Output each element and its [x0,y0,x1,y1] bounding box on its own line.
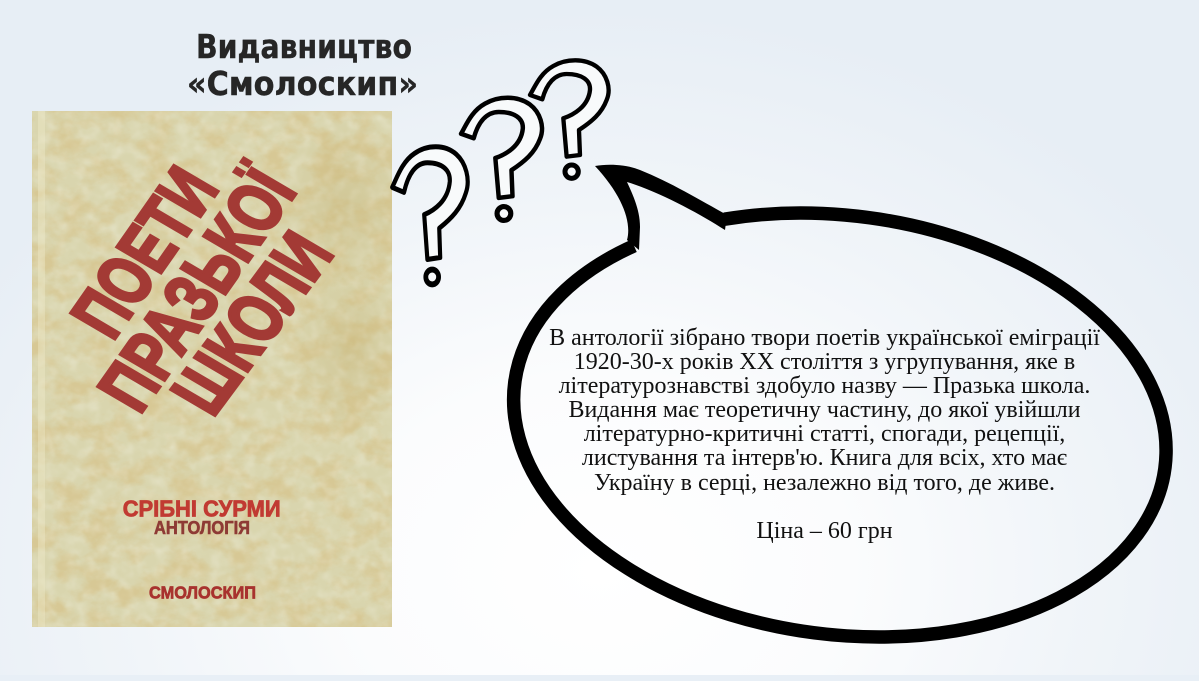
bubble text: Україну в серці, незалежно від того, де живе. [594,470,1055,496]
bubble text [549,325,1100,544]
bubble outline [514,213,1166,637]
cover title [68,156,336,418]
icon: question mark left [392,147,468,284]
bubble text: В антології зібрано твори поетів української еміграції [549,325,1100,351]
bubble text: літературознавстві здобуло назву — Празька школа. [559,373,1090,399]
bubble text: Видання має теоретичну частину, до якої увійшли [568,397,1081,423]
paper texture [32,111,392,627]
title [187,27,418,103]
cover title: ШКОЛИ [155,219,349,427]
cover publisher: СМОЛОСКИП [149,582,256,602]
bottom band [0,675,1199,681]
cover paper [32,111,392,627]
spine highlight [38,111,45,627]
icon: question mark right [530,60,609,178]
paper speckle [32,111,392,627]
cover subtitle: СРІБНІ СУРМИ [123,496,281,522]
bubble tail [595,165,727,250]
speech bubble [514,165,1166,637]
book cover [32,111,415,627]
paper stain top right [300,149,390,266]
icon: question mark middle [461,98,542,220]
paper stain lower right [310,291,392,406]
title: Видавництво [196,27,412,66]
bubble text: Ціна – 60 грн [756,518,893,544]
cover title: ПРАЗЬКОЇ [82,156,312,424]
bubble text: листування та інтерв'ю. Книга для всіх, хто має [582,445,1067,471]
cover title: ПОЕТИ [55,154,234,350]
title: «Смолоскип» [187,64,418,103]
bubble text: літературно-критичні статті, спогади, рецепції, [584,421,1065,447]
cover anthology label: АНТОЛОГІЯ [154,518,250,538]
bubble text: 1920-30-х років XX століття з угрупування, яке в [574,349,1075,375]
